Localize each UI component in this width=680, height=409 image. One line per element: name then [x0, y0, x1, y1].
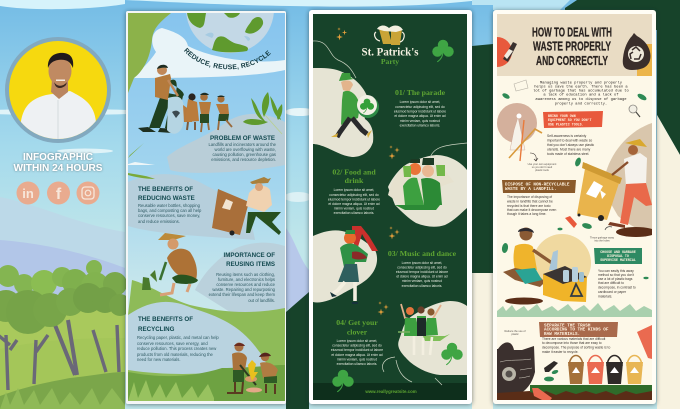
- section 04 text: clover: [347, 328, 368, 336]
- panel 1 text: importance of reusing items: REUSING ITEMS: [226, 261, 275, 268]
- section 04 text: et dolore magna aliqua. Ut enim ad: [331, 353, 383, 357]
- header band: [497, 14, 652, 76]
- profile photo: [5, 37, 111, 143]
- bagpipe lady: [330, 226, 378, 304]
- panel 1 text: benefits of recycling: THE BENEFITS OF: [138, 316, 193, 323]
- panel: how to deal with waste: [482, 10, 656, 404]
- panel 1 text: problem of waste: emissions, and resource depletion.: [211, 157, 276, 162]
- body: separate trash: decompose. The purpose of sorting waste is to: [542, 346, 610, 350]
- headline: infographic within 24 hours: INFOGRAPHIC: [23, 152, 93, 163]
- panel 1 text: importance of reusing items: IMPORTANCE OF: [224, 252, 275, 259]
- section 01 text: eiusmod tempor incididunt ut labore: [394, 110, 446, 114]
- red bottle: [532, 388, 552, 403]
- litter and holes: into the holes: [594, 238, 610, 242]
- litter and holes: [505, 216, 656, 304]
- boy with bottles box: [503, 228, 591, 302]
- body: garbage disposal: method so that you don't: [598, 273, 634, 277]
- section 03 text: 03/ Music and dance: [388, 249, 457, 258]
- panel: reduce reuse recycle: [122, 8, 290, 408]
- social icons: in: [22, 186, 34, 201]
- drummer: [331, 73, 379, 138]
- body: garbage disposal: [598, 269, 636, 298]
- body: separate trash: [542, 337, 610, 354]
- footer band: [313, 383, 467, 400]
- litter and holes: Throw garbage away: [590, 236, 615, 240]
- soil and grass: [497, 385, 652, 400]
- panel 1 text: importance of reusing items: [209, 252, 276, 303]
- panel 1 text: problem of waste: [208, 135, 277, 162]
- red banner: USE PLASTIC TOOLS.: [548, 122, 584, 126]
- section 02 text: [328, 168, 380, 215]
- footer url: www.reallygreatsite.com: [364, 389, 417, 394]
- panel 1 text: benefits of recycling: products from old materials, reducing the: [137, 352, 214, 357]
- sparkles: [336, 27, 400, 315]
- title: [532, 27, 612, 66]
- header decoration left: [497, 37, 517, 67]
- beige arc behind man: [603, 123, 652, 231]
- plastic tools circle: [497, 103, 542, 161]
- panel 1 text: problem of waste: PROBLEM OF WASTE: [210, 135, 275, 142]
- section 03 text: [388, 249, 457, 288]
- body: garbage disposal: cardboard or paper: [598, 290, 627, 294]
- title arc: REDUCE, REUSE, RECYCLE: [184, 48, 271, 70]
- red banner: BRING YOUR OWN: [548, 114, 576, 118]
- brown banner: WASTE BY A LANDFILL.: [505, 187, 557, 192]
- section 02 text: et dolore magna aliqua. Ut enim ad: [328, 202, 380, 206]
- panel 1 text: benefits of recycling: RECYCLING: [138, 326, 175, 333]
- clovers: [332, 40, 463, 392]
- panel 1 text: benefits of recycling: reduce pollution. This process creates new: [137, 346, 217, 351]
- body: separate trash: make it easier to recycle.: [542, 350, 579, 354]
- arrow and caption: so you don't need: [532, 165, 553, 169]
- intro text: a lack of education and a lack of: [543, 92, 619, 98]
- social icons: f: [56, 186, 62, 203]
- section 03 text: Lorem ipsum dolor sit amet,: [402, 261, 442, 265]
- body: self awareness: Self-awareness is certainly: [547, 134, 587, 138]
- man with bin: [212, 177, 281, 236]
- panel 1 text: importance of reusing items: Reusing items such as clothing,: [216, 272, 275, 277]
- section 04 text: exercitation ullamco laboris.: [337, 362, 377, 366]
- brown banner: separate: SEPARATE THE TRASH: [544, 323, 591, 328]
- intro text: [533, 80, 630, 106]
- background trees: [0, 260, 131, 409]
- panel 1 text: benefits of recycling: Recycling paper, plastic, and metal can help: [137, 335, 219, 340]
- body: separate trash: There are various materials that are difficult: [542, 337, 605, 341]
- headline: infographic within 24 hours: [14, 152, 103, 174]
- green banner: DISPOSAL TO: [607, 254, 629, 258]
- earth globe: [186, 13, 274, 53]
- farmer planting: [142, 233, 198, 295]
- garbage bag header: [623, 33, 652, 76]
- thin curved lines: [313, 41, 467, 385]
- title: WASTE PROPERLY: [533, 38, 611, 54]
- body: landfill: that can make it decompose even: [507, 208, 556, 212]
- panel 1 text: importance of reusing items: waste. Repairing and repurposing: [212, 287, 276, 292]
- section 03 text: exercitation ullamco laboris.: [402, 284, 442, 288]
- intro text: Managing waste properly and properly: [540, 80, 623, 86]
- intro text: properly and correctly.: [555, 102, 607, 106]
- intro text: awareness among us to dispose of garbage: [535, 97, 627, 102]
- section 03 text: minim veniam, quis nostrud: [402, 279, 442, 283]
- grass strip: [497, 303, 652, 317]
- black bottle: [544, 361, 558, 372]
- beer mugs logo: [375, 26, 404, 45]
- body: landfill: recycled is that there are toxic: [507, 204, 551, 208]
- arrow and caption: Use your own equipment: [528, 162, 557, 166]
- section 04 text: minim veniam, quis nostrud: [337, 358, 377, 362]
- section 04 text: eiusmod tempor incididunt ut labore: [331, 348, 383, 352]
- cream blobs: [313, 68, 467, 375]
- section 04 text: 04/ Get your: [336, 318, 378, 327]
- two men toasting: [388, 158, 445, 210]
- litter pickers family: [138, 65, 232, 134]
- green hillside top left: [128, 13, 171, 93]
- body: self awareness: important to deal with waste so: [547, 138, 592, 142]
- body: garbage disposal: that are difficult to: [598, 281, 624, 285]
- panel 1 text: benefits of reducing waste: and reduce emissions.: [138, 219, 180, 224]
- body: self awareness: [547, 134, 595, 156]
- red plastic corner: [637, 325, 652, 359]
- white cloud: [134, 28, 285, 78]
- dancers: [398, 304, 450, 355]
- section 02 text: minim veniam, quis nostrud: [334, 206, 374, 210]
- black bag: [497, 342, 535, 396]
- title: AND CORRECTLY: [536, 53, 608, 68]
- panel 1 text: benefits of reducing waste: conserve resources, save money,: [138, 213, 200, 218]
- pale blob: importance: [195, 243, 285, 312]
- small doodles and leaves: [501, 80, 649, 381]
- intro text: lot of garbage that has accumulated due to: [533, 88, 630, 94]
- section 01 text: minim veniam, quis nostrud: [400, 119, 440, 123]
- section 01 text: consectetur adipiscing elit, sed do: [395, 105, 445, 109]
- red banner: EQUIPMENT SO YOU DON'T: [548, 118, 592, 122]
- body: self awareness: tools made of stainless steel.: [547, 152, 589, 156]
- section 02 text: eiusmod tempor incididunt ut labore: [328, 198, 380, 202]
- brown banner: [502, 180, 576, 193]
- body: garbage disposal: decompose, in contrast to: [598, 286, 636, 290]
- panel 1 text: benefits of reducing waste: [138, 186, 202, 224]
- caption bag: Reduce the use of: [504, 329, 526, 333]
- section 02 text: Lorem ipsum dolor sit amet,: [334, 188, 374, 192]
- section 03 text: et dolore magna aliqua. Ut enim ad: [396, 274, 448, 278]
- grass: [128, 365, 285, 401]
- arrow and caption: [528, 153, 557, 172]
- panel 1 text: benefits of recycling: conserve resources, save energy, and: [137, 341, 208, 346]
- blob: recycling: [128, 302, 266, 374]
- ground band: [128, 280, 285, 376]
- section 02 text: consectetur adipiscing elit, sed do: [329, 193, 379, 197]
- section 01 text: Lorem ipsum dolor sit amet,: [400, 100, 440, 104]
- panel 1 text: benefits of reducing waste: bags, and composting can all help: [138, 208, 202, 213]
- grey blob: problem: [167, 114, 285, 173]
- arrow and caption: plastic tools: [535, 168, 549, 172]
- green banner: [594, 248, 642, 264]
- section 01 text: [394, 88, 446, 128]
- red banner: [543, 111, 603, 128]
- panel: st patrick's party: [309, 10, 472, 404]
- panel 1 text: importance of reusing items: conserve resources and reduce: [216, 282, 276, 287]
- body: garbage disposal: materials.: [598, 294, 612, 298]
- caption bag: plastic: [511, 332, 519, 336]
- section 04 text: consectetur adipiscing elit, sed do: [332, 344, 382, 348]
- green banner: SUPERVISE MATERIAL: [600, 258, 636, 262]
- title: St. Patrick's: [362, 44, 419, 58]
- body: self awareness: utensils. Most there are many: [547, 148, 591, 152]
- panel 1 text: benefits of recycling: need for new materials.: [137, 357, 181, 362]
- body: landfill: The importance of disposing of: [507, 195, 552, 199]
- brown banner: DISPOSE OF NON-RECYCLABLE: [505, 182, 570, 188]
- panel 1 text: benefits of reducing waste: Reusable water bottles, shopping: [138, 203, 201, 208]
- body: landfill: though it takes a long time.: [507, 212, 546, 216]
- body: garbage disposal: You can easily this away: [598, 269, 634, 273]
- recycle buckets: [568, 356, 643, 384]
- body: garbage disposal: use a lot of plastic bags: [598, 277, 633, 281]
- brown banner: separate: [539, 322, 618, 337]
- section 02 text: 02/ Food and: [332, 168, 376, 176]
- intro text: helps us save the earth. There has been a: [534, 84, 628, 90]
- section 02 text: drink: [345, 176, 364, 185]
- body: landfill: [507, 195, 556, 216]
- body: self awareness: that you don't always use plastic: [547, 143, 595, 147]
- section 01 text: exercitation ullamco laboris.: [400, 124, 440, 128]
- brown banner: separate: ACCORDING TO THE KINDS OF: [544, 328, 609, 333]
- title: Party: [381, 57, 399, 66]
- section 04 text: Lorem ipsum dolor sit amet,: [337, 339, 377, 343]
- body: landfill: waste in landfills that cannot be: [507, 200, 553, 204]
- grey blob: benefits: [128, 174, 255, 240]
- section 01 text: et dolore magna aliqua. Ut enim ad: [394, 114, 446, 118]
- green banner: CHOOSE AND GARBAGE: [600, 250, 636, 254]
- panel 1 text: benefits of reducing waste: THE BENEFITS OF: [138, 186, 193, 193]
- brown banner: separate: RAW MATERIALS.: [544, 332, 580, 337]
- social icons: [16, 182, 100, 204]
- panel 1 text: benefits of reducing waste: REDUCING WASTE: [138, 195, 195, 202]
- title: [362, 48, 418, 66]
- section 03 text: eiusmod tempor incididunt ut labore: [396, 270, 448, 274]
- section 01 text: 01/ The parade: [395, 88, 446, 97]
- section 02 text: exercitation ullamco laboris.: [334, 211, 374, 215]
- panel 1 text: importance of reusing items: out of landfills.: [248, 298, 275, 303]
- leaves: [128, 143, 155, 179]
- panel 1 text: importance of reusing items: extend their lifespan and keep them: [209, 292, 275, 297]
- panel 1 text: problem of waste: Landfills and incinerators around the: [208, 142, 277, 147]
- body: separate trash: to decompose into those that are easy to: [542, 341, 602, 345]
- title: HOW TO DEAL WITH: [532, 24, 612, 40]
- kids planting tree: [227, 342, 278, 394]
- section 04 text: [331, 318, 383, 366]
- panel 1 text: problem of waste: causing pollution, greenhouse gas: [212, 152, 276, 157]
- caption bag: [504, 329, 526, 336]
- man with yellow bin: [577, 139, 652, 228]
- panel 1 text: problem of waste: world are overflowing with waste,: [215, 147, 276, 152]
- section 03 text: consectetur adipiscing elit, sed do: [397, 266, 447, 270]
- panel 1 text: importance of reusing items: furniture, and electronics helps: [218, 277, 275, 282]
- panel 1 text: benefits of recycling: [137, 316, 219, 362]
- headline: infographic within 24 hours: WITHIN 24 HOURS: [14, 163, 103, 174]
